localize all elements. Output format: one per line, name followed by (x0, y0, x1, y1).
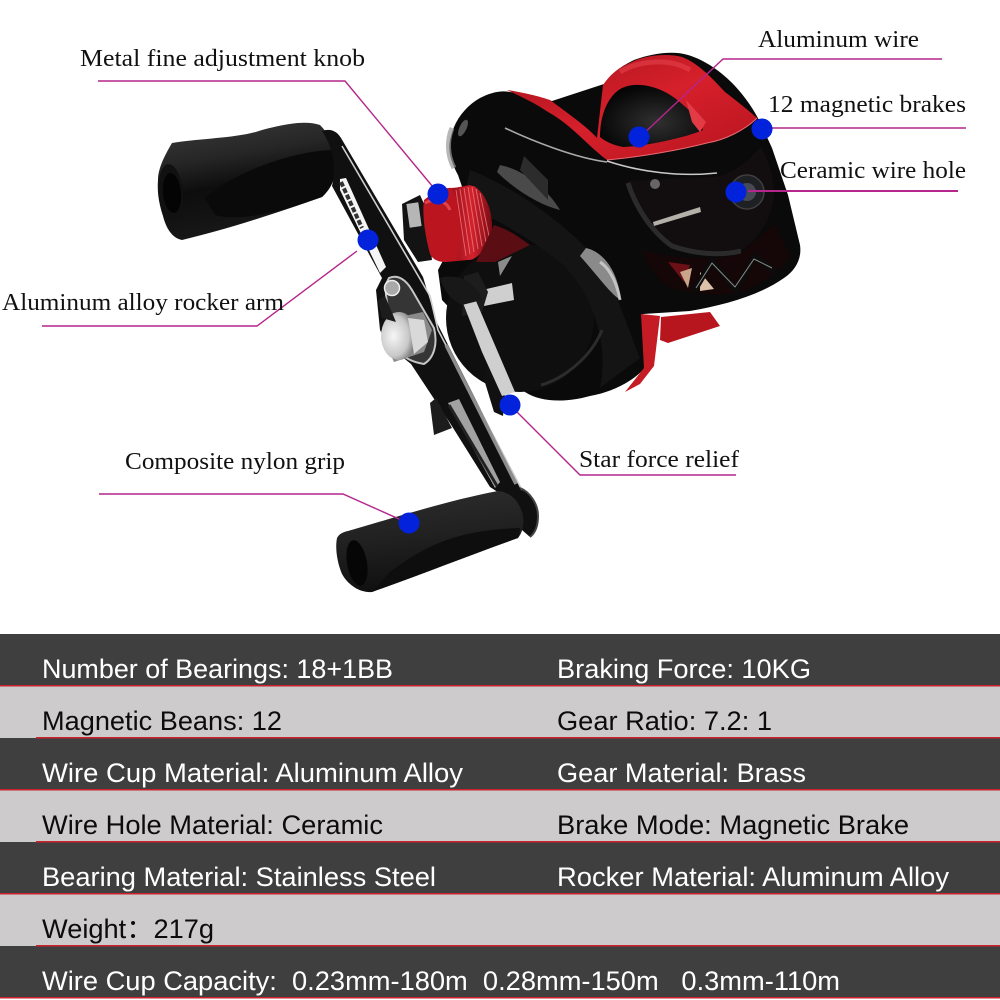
table row bands (0, 634, 1000, 998)
spool cup window (600, 85, 706, 147)
label: aluminum alloy rocker arm: Aluminum alloy rocker arm (2, 290, 284, 316)
ceramic line hole (730, 175, 764, 209)
spec: gear material: Gear Material: Brass (557, 758, 806, 788)
label: star force relief: Star force relief (579, 447, 739, 473)
reel body (438, 53, 800, 401)
front line guide window (607, 146, 774, 254)
spec: wire hole material: Wire Hole Material: Ceramic (42, 810, 383, 840)
label: metal fine adjustment knob: Metal fine adjustment knob (80, 46, 365, 72)
label: aluminum wire: Aluminum wire (758, 27, 919, 53)
reel crank arm (322, 130, 538, 537)
silver plate and bolt (381, 277, 436, 364)
callout line: ceramic wire hole (748, 190, 958, 192)
spec: bearing material: Bearing Material: Stainless Steel (42, 862, 436, 892)
label: 12 magnetic brakes: 12 magnetic brakes (768, 92, 966, 118)
label: ceramic wire hole: Ceramic wire hole (780, 158, 966, 184)
spec: weight: Weight：217g (42, 914, 214, 944)
spec: wire cup material: Wire Cup Material: Aluminum Alloy (42, 758, 464, 788)
star drag lever (440, 277, 515, 416)
lower vented teeth (642, 224, 790, 295)
spec: number of bearings: Number of Bearings: 18+1BB (42, 654, 393, 684)
spec: rocker material: Rocker Material: Aluminum Alloy (557, 862, 950, 892)
spec: wire cup capacity: Wire Cup Capacity: 0.23mm-180m 0.28mm-150m 0.3mm-110m (42, 966, 840, 996)
marker dots (358, 118, 772, 534)
illustration: baitcasting fishing reel (156, 53, 800, 592)
red frame band (507, 55, 757, 160)
adjustment knob (402, 185, 530, 262)
spec: magnetic beans: Magnetic Beans: 12 (42, 706, 282, 736)
specifications table (0, 634, 1000, 998)
spec: gear ratio: Gear Ratio: 7.2: 1 (557, 706, 772, 736)
callout line: aluminum wire (640, 59, 942, 137)
spec: brake mode: Brake Mode: Magnetic Brake (557, 810, 909, 840)
reel bottom handle knob (336, 491, 523, 592)
callout line: metal fine adjustment knob (98, 81, 433, 187)
spec: braking force: Braking Force: 10KG (557, 654, 811, 684)
callout line: 12 magnetic brakes (762, 127, 966, 129)
callout line: star force relief (510, 405, 736, 475)
side plate (446, 118, 640, 392)
label: composite nylon grip: Composite nylon grip (125, 449, 345, 475)
reel top handle knob (156, 123, 336, 240)
callout line: aluminum alloy rocker arm (42, 251, 357, 326)
red side strip and trigger (625, 312, 720, 392)
callout line: composite nylon grip (99, 494, 408, 523)
